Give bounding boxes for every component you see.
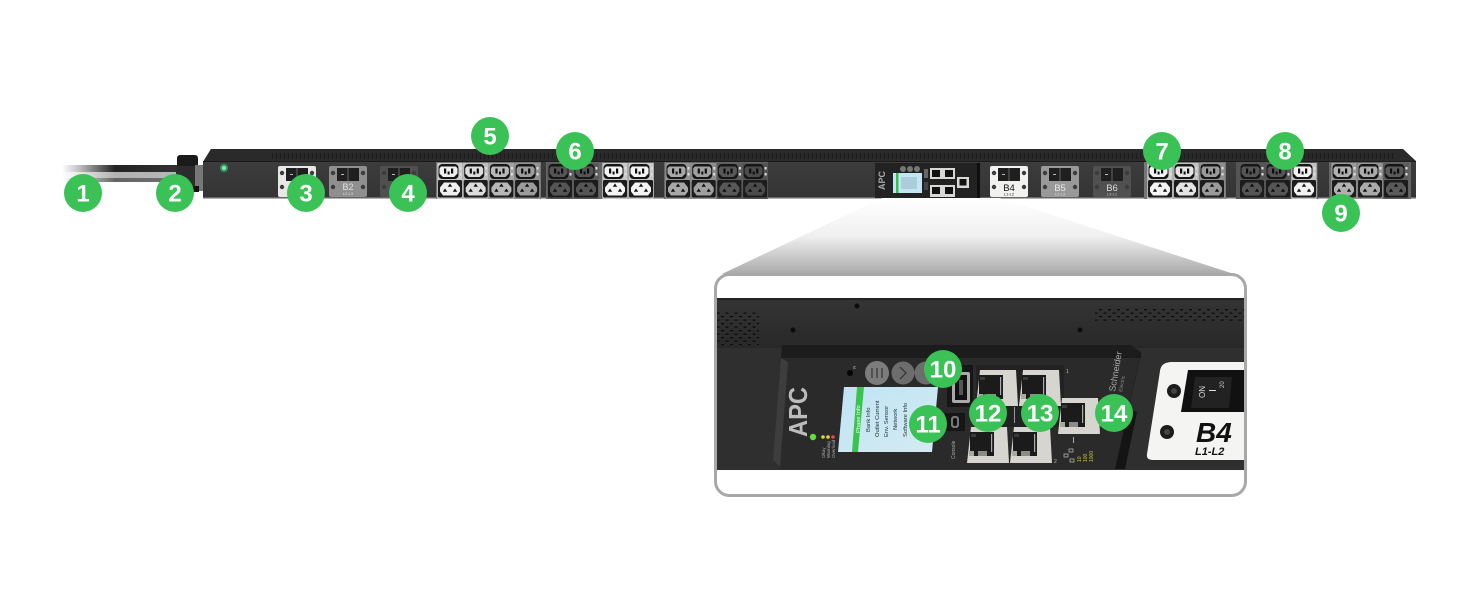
breaker B4 [990, 166, 1028, 197]
breaker plate B4: ON [1198, 386, 1207, 398]
outlet group F [1329, 162, 1411, 199]
badge 2 [156, 174, 194, 212]
badge 6: 6 [568, 138, 582, 166]
network management card [875, 163, 980, 198]
status LEDs: Warning [826, 441, 831, 458]
uplink port [1058, 398, 1100, 462]
badge 8 [1266, 132, 1304, 170]
breaker B6 [1093, 166, 1131, 197]
reset button [847, 365, 857, 376]
badge 1 [64, 174, 102, 212]
badge 12: 12 [975, 400, 1001, 428]
ground indicator [220, 164, 228, 172]
USB port [947, 365, 973, 407]
enclosure top [717, 298, 1244, 348]
badge 2: 2 [168, 180, 182, 208]
uplink port: 1000 [1089, 451, 1095, 462]
LCD screen: Bank Info [866, 408, 872, 432]
breaker B6: B6 [1106, 183, 1118, 194]
breaker B5: B5 [1054, 183, 1066, 194]
badge 11: 11 [915, 412, 941, 438]
breaker plate B4: L1-L2 [1195, 446, 1224, 458]
badge 3: 3 [299, 180, 313, 208]
breaker B2: L2-L3 [343, 191, 354, 196]
LCD screen: Phase Info [856, 405, 862, 433]
badge 10 [924, 350, 962, 388]
badge 9 [1322, 194, 1360, 232]
breaker plate B4: 20 [1220, 381, 1226, 388]
control module [773, 345, 1141, 469]
APC logo: APC [783, 387, 813, 437]
navigation buttons [865, 361, 938, 385]
badge 13 [1021, 394, 1059, 432]
badge 7: 7 [1155, 138, 1169, 166]
LCD screen: Network [893, 409, 899, 430]
breaker B1 [278, 166, 316, 197]
uplink port: 100 [1083, 453, 1089, 462]
breaker B3 [380, 166, 418, 197]
zoom funnel [722, 198, 1234, 274]
outlet group C [664, 162, 768, 199]
detail inset panel [716, 274, 1246, 496]
badge 14 [1095, 394, 1133, 432]
network ports: 2 [1054, 459, 1057, 465]
LCD screen: Software Info [903, 403, 909, 437]
cable gland [176, 155, 203, 192]
breaker B4: B4 [1003, 183, 1015, 194]
breaker B6: L3-L1 [1107, 192, 1118, 196]
outlet group E [1236, 162, 1318, 199]
enclosure front [717, 348, 1244, 470]
badge 6 [556, 132, 594, 170]
outlet group B [546, 162, 654, 199]
badge 4 [389, 174, 427, 212]
network ports [967, 365, 1069, 465]
breaker B5: L2-L3 [1055, 192, 1066, 196]
reset button: R [852, 365, 857, 369]
badge 14: 14 [1101, 400, 1128, 428]
badge 12 [969, 394, 1007, 432]
breaker plate B4 [1147, 362, 1244, 460]
status LEDs: Okay [821, 447, 826, 458]
Schneider Electric logo: Electric [1118, 375, 1127, 392]
badge 3 [287, 174, 325, 212]
status LEDs: Overload [831, 439, 836, 458]
badge 11 [909, 405, 947, 443]
breaker plate B4: B4 [1196, 417, 1232, 448]
Schneider Electric logo: Schneider [1107, 351, 1124, 392]
LCD screen: Outlet Current [875, 400, 881, 437]
outlet group D [1144, 162, 1226, 199]
micro USB port: Console [951, 440, 957, 459]
breaker B2 [329, 166, 367, 197]
badge 1: 1 [76, 180, 90, 208]
badge 4: 4 [401, 180, 415, 208]
uplink port: 10 [1077, 456, 1083, 462]
outlet group A [436, 162, 541, 199]
badge 13: 13 [1027, 400, 1053, 428]
power cables [62, 165, 180, 182]
status LEDs [810, 434, 836, 458]
breaker B5 [1041, 166, 1079, 197]
micro USB port [945, 413, 965, 459]
badge 5: 5 [483, 124, 497, 150]
badge 10: 10 [930, 356, 956, 384]
LCD screen [838, 387, 938, 452]
network ports: 1 [1066, 369, 1069, 375]
breaker B4: L1-L2 [1004, 192, 1015, 196]
badge 5 [471, 117, 509, 155]
badge 7 [1143, 132, 1181, 170]
PDU body [203, 149, 1416, 198]
network management card: APC [877, 170, 887, 190]
breaker B2: B2 [342, 182, 354, 192]
LCD screen: Env. Sensor [884, 406, 890, 437]
badge 8: 8 [1278, 138, 1292, 166]
badge 9: 9 [1334, 200, 1348, 228]
